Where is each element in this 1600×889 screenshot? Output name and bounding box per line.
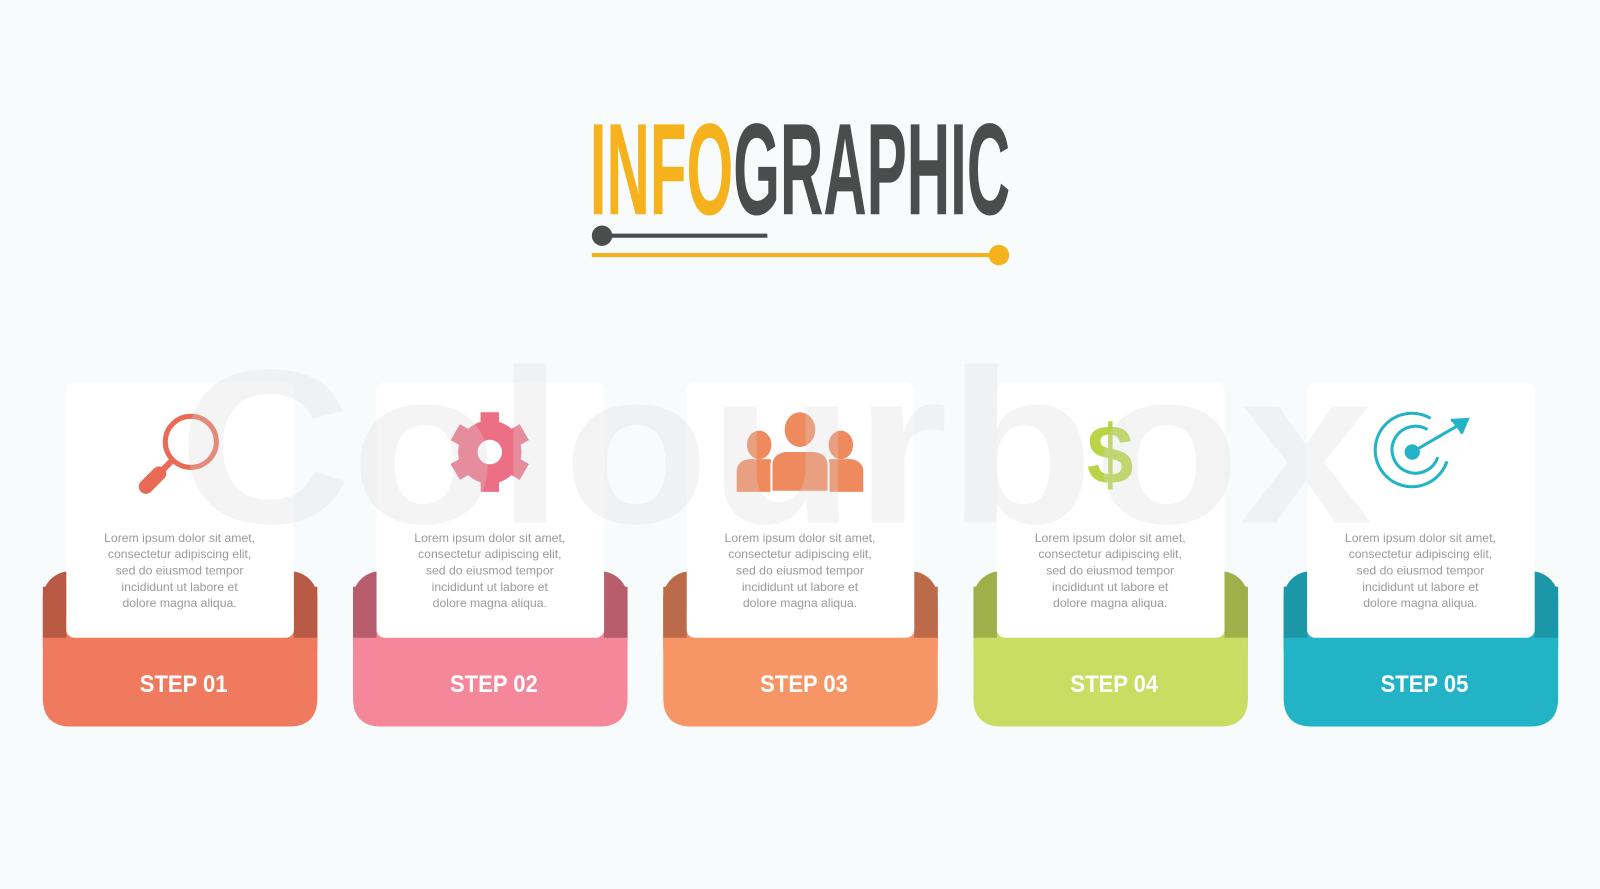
card: step 4: consectetur adipiscing elit, <box>1038 547 1182 561</box>
card: step 2: incididunt ut labore et <box>432 580 549 594</box>
card: step 3: Lorem ipsum dolor sit amet, <box>725 531 875 545</box>
label: step 05: STEP 05 <box>1381 671 1468 698</box>
card: step 2: Lorem ipsum dolor sit amet, <box>414 531 565 545</box>
step 5 <box>1284 383 1558 727</box>
label: step 04: STEP 04 <box>1070 671 1159 698</box>
card: step 1: consectetur adipiscing elit, <box>108 547 251 561</box>
card: step 3: consectetur adipiscing elit, <box>728 547 872 561</box>
card: step 4 <box>997 383 1224 638</box>
card: step 1: sed do eiusmod tempor <box>116 563 244 577</box>
icon: dollar: $ <box>1087 408 1133 502</box>
card: step 5 <box>1307 383 1535 638</box>
card: step 3 <box>687 383 914 638</box>
base: step 3 <box>663 571 938 727</box>
step 4 <box>973 383 1248 727</box>
card: step 5: sed do eiusmod tempor <box>1356 563 1484 577</box>
card: step 2: sed do eiusmod tempor <box>426 563 554 577</box>
base: step 4 <box>973 571 1248 727</box>
base: step 2 <box>353 571 628 727</box>
card: step 5: Lorem ipsum dolor sit amet, <box>1345 531 1496 545</box>
infographic <box>43 96 1558 727</box>
icon: target <box>1375 413 1467 487</box>
step 1 <box>43 383 317 727</box>
icon: gear <box>451 412 529 492</box>
card: step 1 <box>66 383 294 638</box>
card: step 1: incididunt ut labore et <box>121 580 238 594</box>
card: step 4: Lorem ipsum dolor sit amet, <box>1035 531 1186 545</box>
card: step 3: dolore magna aliqua. <box>743 596 857 610</box>
base: step 1 <box>43 571 317 727</box>
card: step 4: incididunt ut labore et <box>1052 580 1169 594</box>
icon: people <box>737 412 863 492</box>
card: step 1: dolore magna aliqua. <box>122 596 237 610</box>
step 3 <box>663 383 938 727</box>
label: step 01: STEP 01 <box>140 671 228 698</box>
card: step 4: sed do eiusmod tempor <box>1046 563 1174 577</box>
card: step 3: incididunt ut labore et <box>742 580 859 594</box>
title underline dark <box>592 226 767 246</box>
label: step 02: STEP 02 <box>450 671 538 698</box>
card: step 2: consectetur adipiscing elit, <box>418 547 562 561</box>
card: step 3: sed do eiusmod tempor <box>736 563 864 577</box>
label: step 03: STEP 03 <box>760 671 848 698</box>
card: step 2 <box>377 383 604 638</box>
card: step 5: incididunt ut labore et <box>1362 580 1479 594</box>
card: step 5: consectetur adipiscing elit, <box>1349 547 1492 561</box>
card: step 4: dolore magna aliqua. <box>1053 596 1167 610</box>
icon: magnifier <box>146 416 216 487</box>
base: step 5 <box>1284 571 1558 727</box>
step 2 <box>353 383 628 727</box>
card: step 5: dolore magna aliqua. <box>1363 596 1478 610</box>
card: step 2: dolore magna aliqua. <box>433 596 547 610</box>
card: step 1: Lorem ipsum dolor sit amet, <box>104 531 255 545</box>
title underline yellow <box>592 245 1009 265</box>
watermark: Colourbox <box>179 324 1372 569</box>
title: INFOGRAPHIC <box>590 96 1010 242</box>
